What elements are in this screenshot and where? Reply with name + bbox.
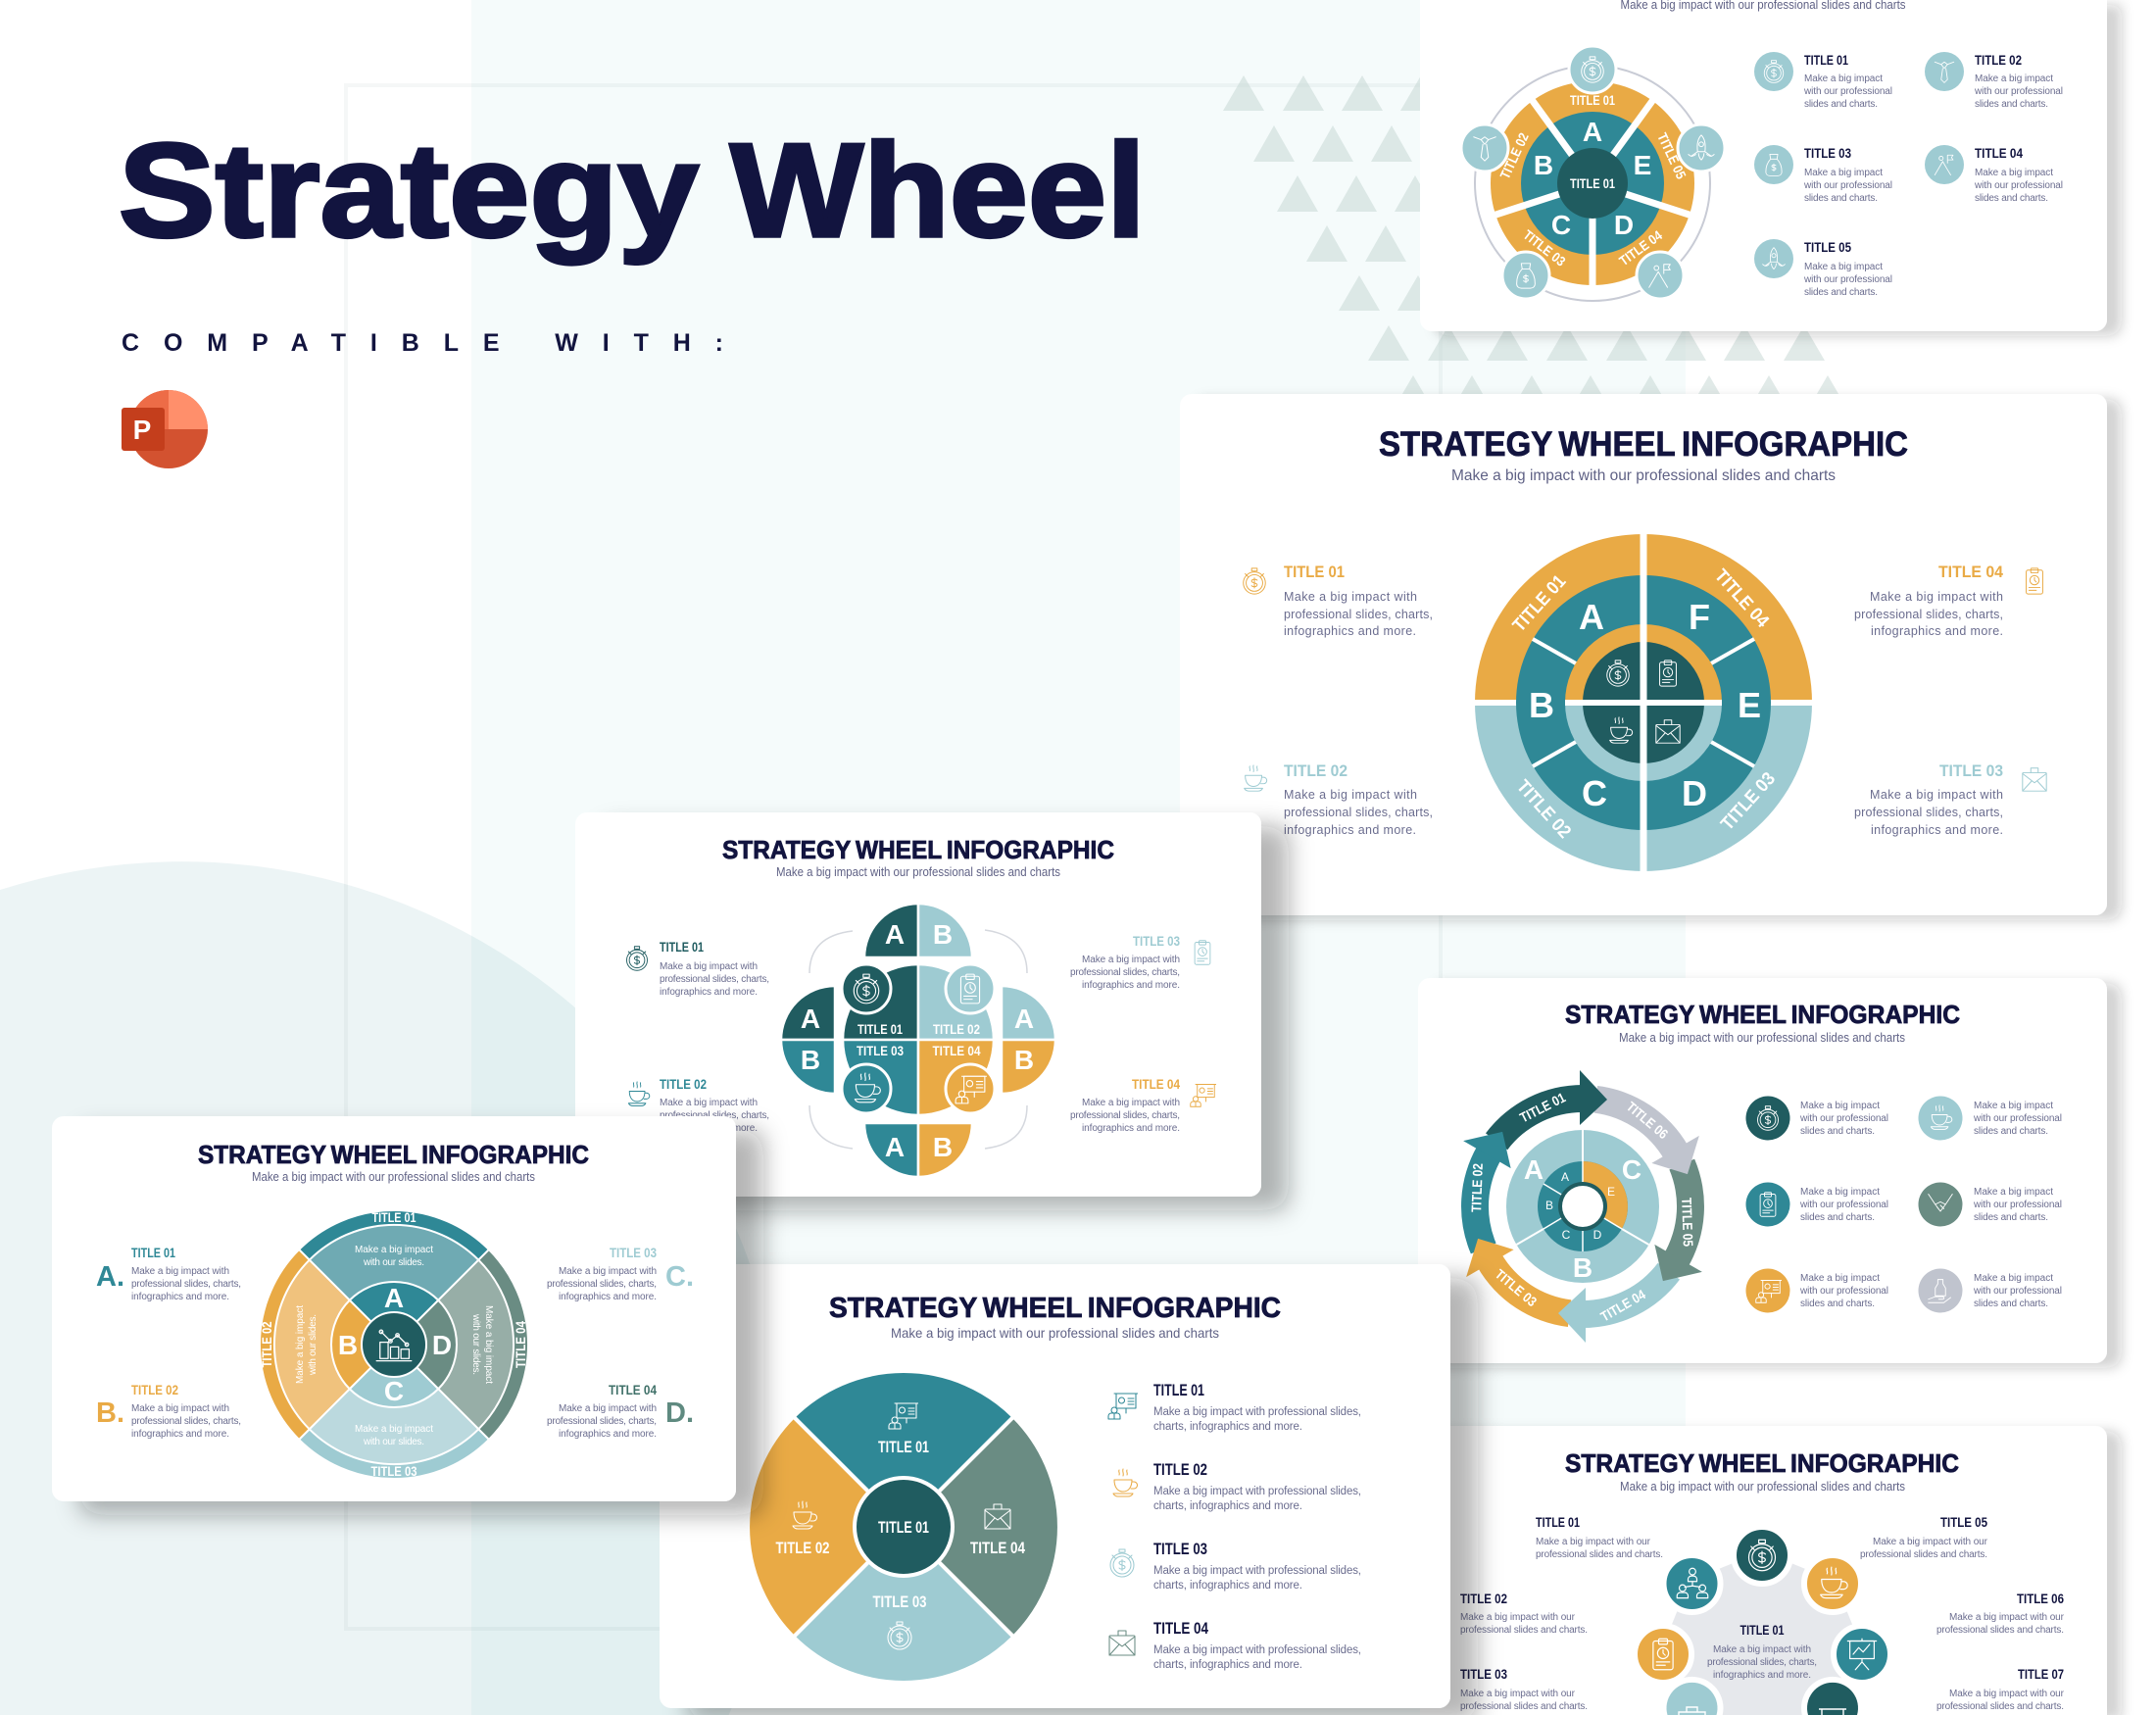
text block: right items: Make a big impact with: [1082, 955, 1180, 965]
text block: left items: TITLE 02: [1284, 761, 1348, 780]
slide heading: STRATEGY WHEEL INFOGRAPHIC: [829, 1293, 1281, 1324]
quadrant wheel chart: Make a big impact: [355, 1424, 433, 1435]
clover chart: [781, 904, 1055, 1177]
quadrant wheel chart: with our slides.: [363, 1257, 424, 1268]
text block: left items: infographics and more.: [131, 1429, 229, 1440]
pentagon wheel chart: D: [1614, 210, 1634, 240]
circular arrows: TITLE 06: [1624, 1099, 1671, 1142]
circular arrows: TITLE 02: [1468, 1163, 1486, 1212]
text block: right items: Make a big impact with our: [1873, 1537, 1988, 1547]
text block: left items: Make a big impact with: [660, 961, 758, 972]
main title: [119, 116, 1146, 265]
octagon ring with icons: professional slides, charts,: [1707, 1657, 1817, 1668]
octagon ring with icons: Make a big impact with: [1713, 1644, 1811, 1655]
background: triangle pattern: [1223, 75, 1848, 411]
clover chart: A: [1014, 1004, 1034, 1034]
pentagon wheel chart: B: [1534, 150, 1553, 180]
clover chart: B: [1014, 1045, 1034, 1075]
circular arrows: TITLE 05: [1679, 1198, 1696, 1247]
quadrant wheel chart: TITLE 01: [372, 1209, 416, 1225]
pie chart: TITLE 02: [776, 1540, 829, 1557]
text block: left items: Make a big impact with our: [1460, 1689, 1576, 1699]
list: four titled items: Make a big impact with professional slides,: [1153, 1565, 1361, 1577]
quadrant wheel chart: D: [432, 1330, 452, 1360]
text block: right items: [1860, 1514, 2065, 1712]
clover chart: TITLE 01: [858, 1021, 903, 1037]
list: four titled items: charts, infographics and more.: [1153, 1500, 1302, 1512]
circular arrows: B: [1573, 1252, 1592, 1283]
list: four titled items: TITLE 04: [1153, 1620, 1209, 1638]
pentagon wheel chart: TITLE 01: [1570, 175, 1615, 191]
text block: left items: TITLE 02: [1460, 1591, 1507, 1606]
list: six icon items: with our professional: [1799, 1113, 1888, 1124]
text block: left items: infographics and more.: [131, 1292, 229, 1302]
clover chart: A: [885, 1132, 905, 1162]
list: five titled items: Make a big impact: [1804, 74, 1883, 84]
list: five titled items: slides and charts.: [1804, 193, 1878, 204]
pie chart: [748, 1371, 1059, 1683]
text block: right items: professional slides, charts,: [1070, 1110, 1180, 1121]
wheel chart: F: [1689, 597, 1710, 637]
wheel chart: A: [1579, 597, 1604, 637]
list: five titled items: TITLE 04: [1975, 145, 2023, 161]
slide subtitle: Make a big impact with our professional slides and charts: [1619, 1030, 1905, 1045]
text block: left items: infographics and more.: [660, 987, 758, 998]
list: six icon items: Make a big impact: [1800, 1101, 1880, 1111]
list: six icon items: [1746, 1096, 2062, 1313]
quadrant wheel chart: C: [384, 1376, 404, 1406]
text block: left items: TITLE 02: [660, 1076, 707, 1092]
list: six icon items: with our professional: [1973, 1286, 2062, 1297]
text block: right items: Make a big impact with our: [1949, 1689, 2065, 1699]
list: five titled items: slides and charts.: [1975, 193, 2048, 204]
octagon ring with icons: infographics and more.: [1713, 1670, 1811, 1681]
slide heading: STRATEGY WHEEL INFOGRAPHIC: [1565, 1000, 1960, 1029]
clover chart: A: [885, 919, 905, 950]
text block: right items: [547, 1245, 694, 1440]
list: six icon items: Make a big impact: [1800, 1273, 1880, 1284]
list: four titled items: Make a big impact with professional slides,: [1153, 1486, 1361, 1497]
clover chart: B: [933, 1132, 953, 1162]
text block: left items: professional slides, charts,: [660, 974, 769, 985]
list: six icon items: slides and charts.: [1800, 1126, 1875, 1137]
wheel icon badges: [1461, 46, 1725, 299]
text block: left items: TITLE 02: [131, 1382, 178, 1397]
slide subtitle: Make a big impact with our professional slides and charts: [891, 1325, 1219, 1341]
circular arrows: TITLE 01: [1517, 1089, 1568, 1125]
text block: right items: infographics and more.: [1082, 980, 1180, 991]
background: hill: [0, 861, 784, 1715]
text block: right items: TITLE 03: [610, 1245, 657, 1260]
list: four titled items: charts, infographics and more.: [1153, 1421, 1302, 1433]
list: five titled items: with our professional: [1974, 180, 2063, 191]
text block: left items: Make a big impact with: [131, 1403, 229, 1414]
text block: left items: B.: [96, 1397, 124, 1429]
octagon ring with icons: TITLE 01: [1740, 1622, 1785, 1638]
text block: right items: infographics and more.: [559, 1292, 657, 1302]
quadrant wheel chart: with our slides.: [470, 1313, 481, 1375]
list: six icon items: with our professional: [1973, 1113, 2062, 1124]
clover chart: TITLE 04: [933, 1043, 981, 1058]
list: six icon items: with our professional: [1799, 1286, 1888, 1297]
text block: left items: TITLE 03: [1460, 1666, 1507, 1682]
circular arrows: A: [1524, 1154, 1544, 1185]
text block: right items: professional slides, charts,: [1854, 608, 2003, 621]
text block: left items: professional slides and charts.: [1460, 1625, 1588, 1636]
text block: right items: infographics and more.: [1871, 624, 2003, 638]
circular arrows: A: [1561, 1170, 1569, 1184]
list: five titled items: with our professional: [1803, 86, 1892, 97]
list: five titled items: TITLE 03: [1804, 145, 1851, 161]
text block: left items: [1460, 1514, 1663, 1712]
text block: right items: Make a big impact with: [1082, 1098, 1180, 1108]
list: six icon items: Make a big impact: [1974, 1187, 2053, 1198]
slide subtitle: Make a big impact with our professional slides and charts: [1620, 1479, 1905, 1494]
circular arrows: E: [1607, 1185, 1615, 1199]
list: five titled items: with our professional: [1974, 86, 2063, 97]
text block: right items: TITLE 04: [609, 1382, 657, 1397]
text block: right items: professional slides, charts,: [547, 1279, 657, 1290]
list: six icon items: with our professional: [1799, 1200, 1888, 1210]
text block: right items: TITLE 06: [2017, 1591, 2064, 1606]
text block: left items: professional slides, charts,: [131, 1279, 241, 1290]
text block: left items: infographics and more.: [1284, 624, 1416, 638]
wheel chart: TITLE 04: [1710, 565, 1773, 632]
panel: slide six sector half wheel: [1180, 394, 2107, 915]
clover chart: B: [801, 1045, 820, 1075]
text block: left items: Make a big impact with our: [1460, 1612, 1576, 1623]
text block: left items: infographics and more.: [660, 1123, 758, 1134]
clover chart: TITLE 03: [857, 1043, 904, 1058]
text block: right items: Make a big impact with our: [1949, 1612, 2065, 1623]
text block: left items: infographics and more.: [1284, 823, 1416, 837]
quadrant wheel chart: TITLE 04: [513, 1321, 528, 1368]
pentagon wheel chart: TITLE 01: [1570, 92, 1615, 108]
wheel chart: D: [1682, 773, 1707, 813]
panel: slide arrow cycle wheel: [1418, 978, 2107, 1363]
pentagon wheel chart: E: [1634, 150, 1651, 180]
text block: left items: [1244, 563, 1433, 837]
wheel chart: TITLE 01: [1509, 571, 1571, 636]
text block: left items: professional slides, charts,: [1284, 608, 1433, 621]
list: six icon items: slides and charts.: [1974, 1126, 2048, 1137]
circular arrows: TITLE 04: [1597, 1286, 1648, 1324]
list: four titled items: Make a big impact with professional slides,: [1153, 1644, 1361, 1656]
pentagon wheel chart: [1475, 66, 1710, 301]
slide subtitle: Make a big impact with our professional slides and charts: [252, 1169, 535, 1184]
list: five titled items: slides and charts.: [1804, 99, 1878, 110]
list: five titled items: with our professional: [1803, 180, 1892, 191]
slide heading: STRATEGY WHEEL INFOGRAPHIC: [198, 1140, 589, 1169]
panel: slide octagon icon ring: [1420, 1426, 2107, 1715]
list: five titled items: Make a big impact: [1975, 168, 2053, 178]
text block: left items: professional slides and charts.: [1460, 1701, 1588, 1712]
text block: right items: TITLE 04: [1132, 1076, 1180, 1092]
text block: left items: professional slides, charts,: [1284, 806, 1433, 819]
text block: right items: [1854, 563, 2046, 837]
text block: right items: professional slides, charts,: [1070, 967, 1180, 978]
quadrant wheel chart: Make a big impact: [355, 1245, 433, 1255]
list: six icon items: Make a big impact: [1800, 1187, 1880, 1198]
slide heading: STRATEGY WHEEL INFOGRAPHIC: [1565, 1448, 1959, 1478]
list: five titled items: slides and charts.: [1975, 99, 2048, 110]
wheel chart: [1475, 531, 1812, 874]
text block: left items: professional slides, charts,: [131, 1416, 241, 1427]
circular arrows: C: [1562, 1228, 1571, 1242]
quadrant wheel chart: TITLE 03: [370, 1463, 417, 1479]
quadrant wheel chart: A: [384, 1283, 404, 1313]
text block: right items: Make a big impact with: [559, 1403, 657, 1414]
text block: right items: TITLE 03: [1133, 933, 1180, 949]
wheel chart: E: [1738, 685, 1761, 725]
text block: right items: TITLE 03: [1939, 761, 2003, 780]
text block: right items: infographics and more.: [559, 1429, 657, 1440]
text block: left items: [96, 1245, 241, 1440]
list: five titled items: TITLE 05: [1804, 239, 1851, 255]
wheel chart: C: [1582, 773, 1607, 813]
text block: left items: Make a big impact with: [131, 1266, 229, 1277]
icon: PowerPoint logo: [122, 390, 208, 468]
pie chart: TITLE 03: [872, 1593, 927, 1611]
list: four titled items: charts, infographics and more.: [1153, 1659, 1302, 1671]
text block: right items: professional slides, charts,: [547, 1416, 657, 1427]
slide subtitle: Make a big impact with our professional slides and charts: [776, 864, 1060, 879]
panel: slide four sector pie: [660, 1264, 1450, 1708]
text block: left items: TITLE 01: [1536, 1514, 1580, 1530]
list: five titled items: Make a big impact: [1804, 262, 1883, 272]
main title: Strategy: [119, 116, 699, 265]
text block: left items: TITLE 01: [1284, 563, 1345, 581]
wheel chart: TITLE 02: [1512, 776, 1575, 843]
slide subtitle: Make a big impact with our professional slides and charts: [1451, 467, 1836, 484]
text block: right items: TITLE 05: [1940, 1514, 1987, 1530]
text block: left items: A.: [96, 1261, 124, 1293]
text block: right items: infographics and more.: [1082, 1123, 1180, 1134]
list: five titled items: TITLE 01: [1804, 52, 1848, 68]
list: six icon items: Make a big impact: [1974, 1101, 2053, 1111]
text block: left items: Make a big impact with: [660, 1098, 758, 1108]
quadrant wheel chart: with our slides.: [363, 1437, 424, 1447]
text block: right items: TITLE 07: [2018, 1666, 2064, 1682]
text block: left items: professional slides, charts,: [660, 1110, 769, 1121]
list: six icon items: slides and charts.: [1974, 1298, 2048, 1309]
pentagon wheel chart: TITLE 02: [1496, 130, 1532, 181]
slide heading: STRATEGY WHEEL INFOGRAPHIC: [722, 835, 1114, 864]
pentagon wheel chart: TITLE 03: [1520, 226, 1569, 270]
clover chart: TITLE 02: [933, 1021, 980, 1037]
text block: right items: professional slides and charts.: [1936, 1701, 2064, 1712]
pentagon wheel chart: TITLE 05: [1654, 130, 1690, 181]
list: four titled items: TITLE 03: [1153, 1541, 1207, 1558]
text block: right items: TITLE 04: [1938, 563, 2003, 581]
list: five titled items: slides and charts.: [1804, 287, 1878, 298]
text block: left items: Make a big impact with our: [1536, 1537, 1651, 1547]
slide heading: STRATEGY WHEEL INFOGRAPHIC: [1379, 425, 1908, 464]
list: six icon items: with our professional: [1973, 1200, 2062, 1210]
text block: right items: infographics and more.: [1871, 823, 2003, 837]
pie chart: TITLE 01: [878, 1439, 929, 1456]
text block: left items: professional slides and charts.: [1536, 1549, 1663, 1560]
pentagon wheel chart: A: [1583, 117, 1602, 147]
list: five titled items: [1754, 52, 2063, 298]
list: five titled items: with our professional: [1803, 274, 1892, 285]
quadrant wheel chart: [259, 1209, 528, 1479]
background: thin frame: [346, 85, 1441, 1629]
list: six icon items: slides and charts.: [1800, 1212, 1875, 1223]
quadrant wheel chart: TITLE 02: [259, 1321, 274, 1368]
list: four titled items: TITLE 01: [1153, 1382, 1204, 1399]
list: four titled items: TITLE 02: [1153, 1461, 1207, 1479]
text block: right items: [1070, 933, 1216, 1134]
background: pale band: [471, 0, 1686, 1715]
clover chart: A: [801, 1004, 820, 1034]
quadrant wheel chart: with our slides.: [308, 1314, 318, 1376]
list: six icon items: slides and charts.: [1974, 1212, 2048, 1223]
circular arrows: [1429, 1061, 1737, 1351]
text block: right items: Make a big impact with: [1870, 788, 2003, 802]
quadrant wheel chart: Make a big impact: [295, 1305, 306, 1384]
text block: left items: Make a big impact with: [1284, 788, 1417, 802]
text block: left items: Make a big impact with: [1284, 590, 1417, 604]
wheel chart: B: [1529, 685, 1554, 725]
circular arrows: TITLE 03: [1493, 1266, 1540, 1309]
text block: right items: professional slides and charts.: [1936, 1625, 2064, 1636]
subtitle: compatible with: COMPATIBLE WITH:: [122, 329, 723, 357]
main title: Wheel: [730, 116, 1146, 265]
text block: right items: D.: [665, 1397, 694, 1429]
wheel chart: TITLE 03: [1717, 768, 1780, 835]
icon: PowerPoint logo: P: [133, 415, 151, 445]
clover chart: B: [933, 919, 953, 950]
panel: slide clover wheel: [575, 812, 1261, 1197]
text block: right items: Make a big impact with: [559, 1266, 657, 1277]
text block: left items: [627, 939, 769, 1134]
list: six icon items: Make a big impact: [1974, 1273, 2053, 1284]
text block: right items: professional slides and charts.: [1860, 1549, 1987, 1560]
pentagon wheel chart: TITLE 04: [1616, 227, 1665, 269]
pie chart: TITLE 04: [970, 1540, 1026, 1557]
pentagon wheel chart: C: [1551, 210, 1571, 240]
list: five titled items: Make a big impact: [1804, 168, 1883, 178]
circular arrows: D: [1593, 1228, 1602, 1242]
list: four titled items: Make a big impact with professional slides,: [1153, 1406, 1361, 1418]
text block: left items: TITLE 01: [131, 1245, 175, 1260]
list: four titled items: charts, infographics and more.: [1153, 1580, 1302, 1592]
list: five titled items: TITLE 02: [1975, 52, 2022, 68]
text block: right items: Make a big impact with: [1870, 590, 2003, 604]
circular arrows: B: [1545, 1199, 1553, 1212]
list: four titled items: [1108, 1382, 1361, 1671]
octagon ring with icons: [1635, 1527, 1890, 1715]
text block: right items: C.: [665, 1261, 694, 1293]
pie chart: TITLE 01: [878, 1519, 929, 1537]
text block: right items: professional slides, charts,: [1854, 806, 2003, 819]
panel: slide top right pentagon wheel: [1420, 0, 2107, 331]
list: six icon items: slides and charts.: [1800, 1298, 1875, 1309]
panel: slide four quadrant wheel: [52, 1116, 736, 1501]
list: five titled items: Make a big impact: [1975, 74, 2053, 84]
quadrant wheel chart: B: [338, 1330, 358, 1360]
text block: left items: TITLE 01: [660, 939, 704, 955]
quadrant wheel chart: Make a big impact: [483, 1305, 494, 1384]
circular arrows: C: [1622, 1154, 1642, 1185]
